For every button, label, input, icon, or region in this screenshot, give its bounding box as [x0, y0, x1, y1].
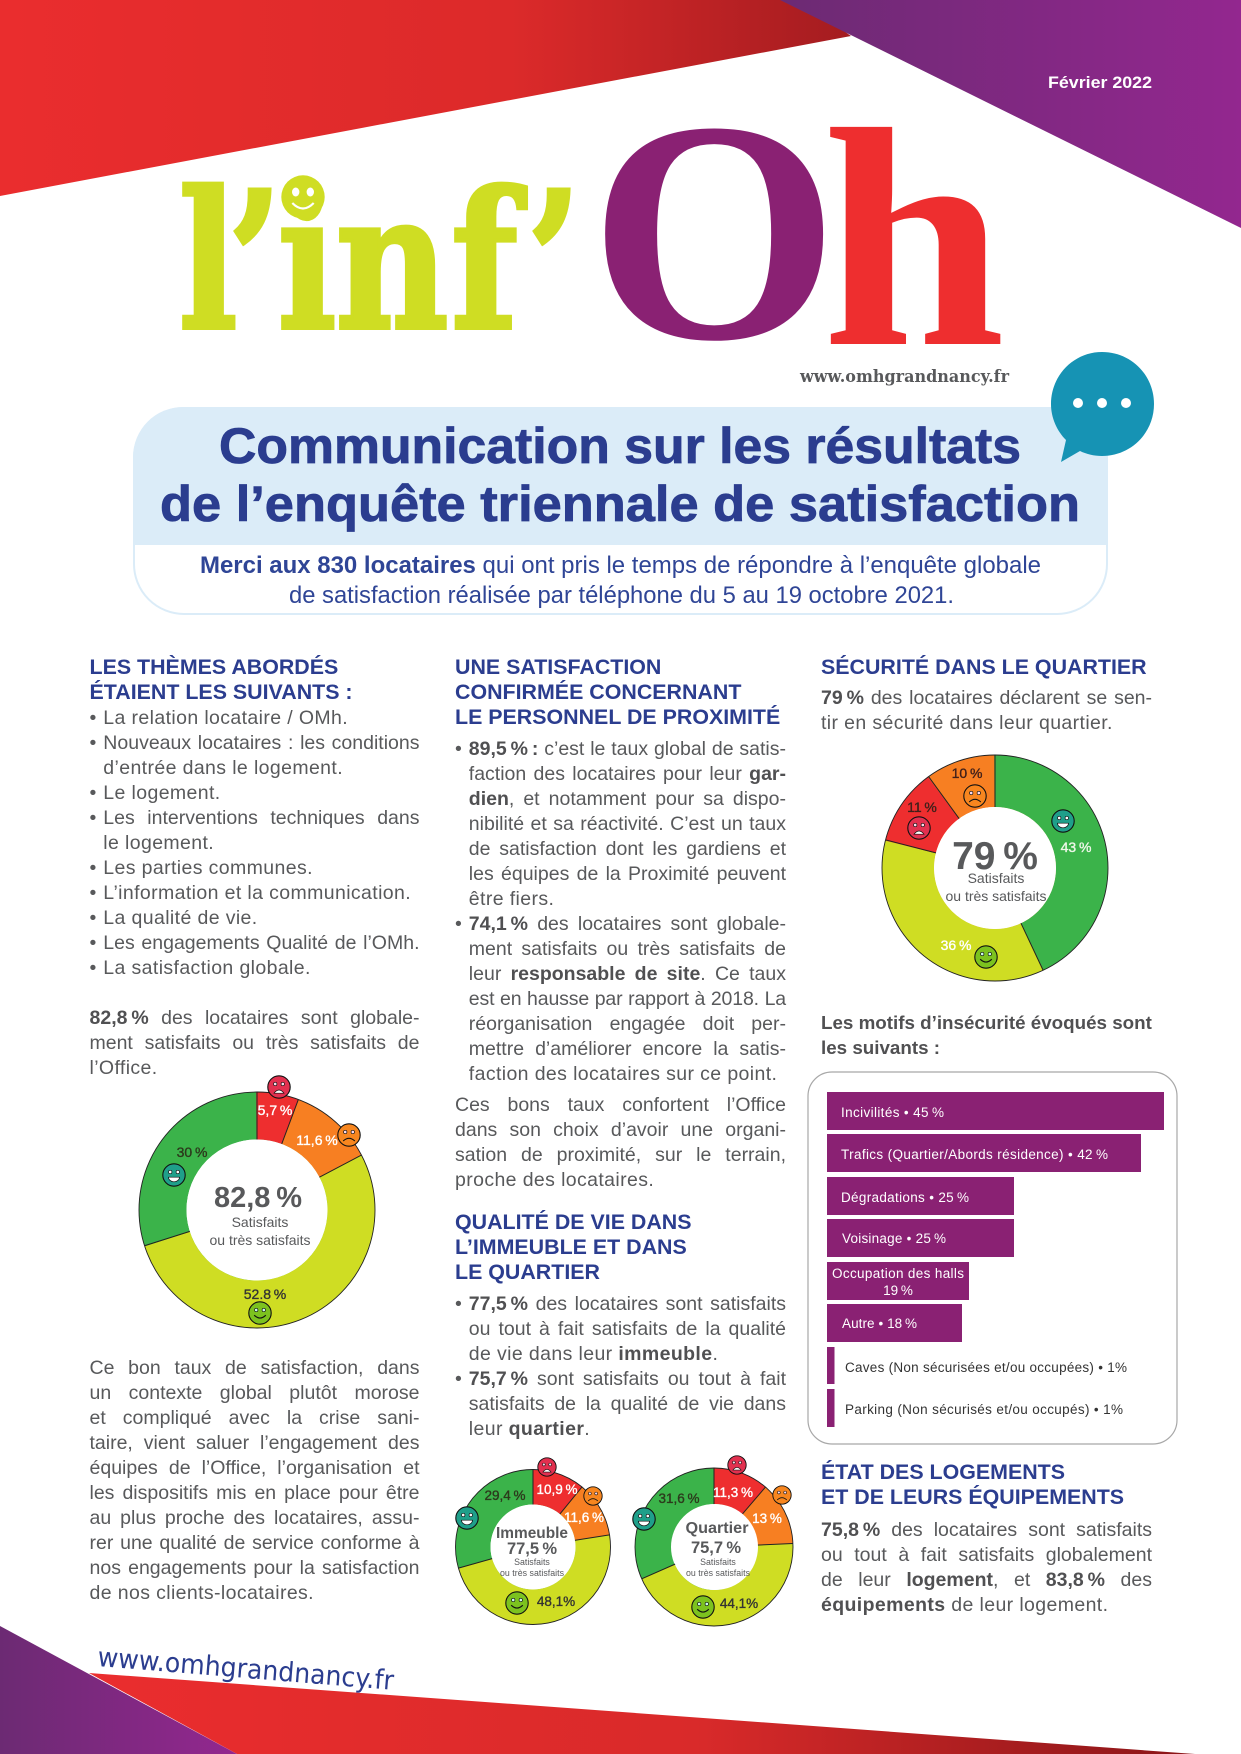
- text block: proximity staff results: 74,1 % des locataires sont globale-: [469, 913, 786, 935]
- centre label: 79 %: [952, 835, 1038, 878]
- text block: housing: [821, 1519, 1152, 1616]
- smiley icons: [633, 1456, 791, 1618]
- bottom red banner: [89, 1673, 1195, 1754]
- heading: themes: LES THÈMES ABORDÉS: [90, 654, 338, 678]
- text block: themes list: [90, 706, 420, 978]
- centre label: Satisfaits: [514, 1557, 550, 1567]
- bar: Dégradations: [827, 1177, 1014, 1215]
- value labels: [177, 1102, 338, 1302]
- text block: themes list: Les engagements Qualité de l’OMh.: [103, 932, 420, 954]
- bar: Voisinage: [827, 1219, 1014, 1257]
- text block: proximity staff results: •: [455, 913, 462, 935]
- heading: proximity staff: UNE SATISFACTION: [455, 654, 661, 678]
- value labels: [659, 1485, 782, 1611]
- text block: themes list: •: [90, 906, 97, 928]
- text block: themes list: •: [90, 732, 96, 754]
- centre label: Satisfaits: [700, 1557, 736, 1567]
- heading: housing condition: [821, 1460, 1124, 1509]
- text block: proximity staff results: les équipes de la Proximité peuvent: [469, 863, 786, 885]
- centre label: 82,8 %: [214, 1182, 302, 1214]
- logo: l'inf': l’inf’: [179, 150, 581, 373]
- icon: smiley dot on the i: [281, 175, 325, 219]
- value labels: 29,4 %: [485, 1488, 525, 1503]
- text block: overall satisfaction: ment satisfaits ou très satisfaits de: [90, 1032, 420, 1054]
- title line 1: Communication sur les résultats: [219, 418, 1021, 474]
- logo: h: h: [822, 65, 1005, 412]
- text block: organisation: [455, 1094, 786, 1191]
- text block: proximity staff results: réorganisation engagée doit per-: [469, 1013, 786, 1035]
- value labels: 30 %: [177, 1144, 207, 1160]
- text block: themes list: Nouveaux locataires : les conditions: [103, 732, 420, 754]
- value labels: 10 %: [952, 765, 982, 781]
- bar: Trafics: [827, 1134, 1141, 1172]
- value labels: 36 %: [941, 937, 971, 953]
- text block: themes list: Les interventions techniques dans: [103, 806, 420, 828]
- value labels: 11 %: [907, 799, 937, 815]
- value labels: 11,3 %: [713, 1485, 753, 1500]
- ring segments: [139, 1092, 375, 1328]
- centre label: ou très satisfaits: [946, 888, 1046, 904]
- value labels: 52.8 %: [244, 1286, 286, 1302]
- text block: themes list: •: [90, 782, 97, 804]
- text block: themes list: •: [90, 882, 97, 904]
- chart frame: [808, 1072, 1177, 1444]
- text block: themes list: •: [90, 956, 97, 978]
- text block: comment on satisfaction: [90, 1357, 420, 1604]
- text block: themes list: •: [90, 856, 97, 878]
- centre label: [686, 1520, 751, 1578]
- text block: housing: équipements de leur logement.: [821, 1594, 1108, 1616]
- text block: themes list: L’information et la communication.: [103, 882, 411, 904]
- heading: neighbourhood safety: SÉCURITÉ DANS LE QUARTIER: [821, 654, 1147, 678]
- logo: O: O: [590, 56, 839, 406]
- text block: quality of life results: ou tout à fait satisfaits de la qualité: [469, 1318, 786, 1340]
- text block: themes list: La qualité de vie.: [103, 906, 258, 928]
- heading: quality of life: LE QUARTIER: [455, 1260, 600, 1284]
- smiley icons: [456, 1458, 602, 1614]
- centre label: Satisfaits: [232, 1214, 288, 1230]
- date: Février 2022: [1048, 74, 1152, 92]
- text block: themes list: •: [90, 806, 96, 828]
- panel title background: [133, 407, 1107, 545]
- value labels: 5,7 %: [258, 1102, 292, 1118]
- text block: proximity staff results: faction des locataires pour leur gar-: [469, 763, 786, 785]
- text block: safety: [821, 686, 1152, 734]
- text block: organisation: dans son choix d’avoir une organi-: [455, 1119, 786, 1141]
- text block: proximity staff results: être fiers.: [469, 888, 554, 910]
- title line 2: de l’enquête triennale de satisfaction: [160, 476, 1080, 532]
- value labels: 13 %: [752, 1511, 782, 1526]
- text block: themes list: •: [90, 932, 96, 954]
- thanks line 2: de satisfaction réalisée par téléphone du 5 au 19 octobre 2021.: [289, 582, 954, 609]
- text block: comment on satisfaction: les dispositifs mis en place pour être: [90, 1482, 420, 1504]
- bar: Autre: [827, 1304, 962, 1342]
- bar: Occupation des halls: Occupation des halls: [832, 1266, 964, 1281]
- text block: proximity staff results: 89,5 % : c’est le taux global de satis-: [469, 738, 786, 760]
- text block: comment on satisfaction: rer une qualité de service conforme à: [90, 1532, 420, 1554]
- donut chart: global satisfaction: [139, 1076, 375, 1328]
- centre label: ou très satisfaits: [500, 1568, 565, 1578]
- text block: safety: 79 % des locataires déclarent se sen-: [821, 686, 1152, 708]
- text block: comment on satisfaction: Ce bon taux de satisfaction, dans: [90, 1357, 420, 1379]
- heading: reasons for insecurity: les suivants :: [821, 1037, 940, 1058]
- ring segments: [456, 1470, 610, 1624]
- text block: organisation: proche des locataires.: [455, 1169, 654, 1191]
- bar: Occupation des halls: [827, 1262, 969, 1300]
- text block: proximity staff results: dien, et notamment pour sa dispo-: [469, 788, 786, 810]
- logo: [179, 56, 1005, 412]
- text block: overall satisfaction: l’Office.: [90, 1056, 158, 1078]
- text block: quality of life results: 75,7 % sont satisfaits ou tout à fait: [469, 1368, 786, 1390]
- text block: quality of life results: •: [455, 1293, 462, 1315]
- text block: organisation: sation de proximité, sur le terrain,: [455, 1144, 786, 1166]
- centre label: Immeuble: [496, 1525, 568, 1542]
- bar: Autre: Autre • 18 %: [842, 1316, 917, 1331]
- icon: speech bubble: [1051, 352, 1154, 462]
- smiley icons: [908, 785, 1074, 968]
- text block: organisation: Ces bons taux confortent l’Office: [455, 1094, 786, 1116]
- text block: comment on satisfaction: un contexte global plutôt morose: [90, 1382, 420, 1404]
- value labels: 44,1%: [720, 1596, 758, 1611]
- text block: proximity staff results: faction des locataires sur ce point.: [469, 1063, 777, 1085]
- heading: themes: ÉTAIENT LES SUIVANTS :: [90, 680, 353, 704]
- value labels: 11,6 %: [564, 1510, 604, 1525]
- heading: quality of life: [455, 1210, 692, 1284]
- heading: housing condition: ÉTAT DES LOGEMENTS: [821, 1460, 1065, 1484]
- text block: themes list: La relation locataire / OMh.: [103, 706, 348, 728]
- text block: proximity staff results: [455, 738, 786, 1085]
- ring segments: [635, 1468, 793, 1626]
- bar: Caves: [827, 1347, 1127, 1384]
- bar chart: reasons for insecurity: [808, 1072, 1177, 1444]
- value labels: 48,1%: [537, 1594, 575, 1609]
- value labels: [485, 1482, 604, 1609]
- bar: Dégradations: Dégradations • 25 %: [841, 1190, 969, 1205]
- text block: proximity staff results: mettre d’améliorer encore la satis-: [469, 1038, 786, 1060]
- heading: reasons for insecurity: [821, 1012, 1152, 1058]
- bar: Occupation des halls: 19 %: [883, 1283, 913, 1298]
- text block: comment on satisfaction: taire, vient saluer l’engagement des: [90, 1432, 420, 1454]
- top red banner: [0, 0, 851, 196]
- text block: housing: de leur logement, et 83,8 % des: [821, 1569, 1152, 1591]
- heading: quality of life: L’IMMEUBLE ET DANS: [455, 1234, 687, 1258]
- smiley icons: [163, 1076, 360, 1324]
- text block: comment on satisfaction: et compliqué avec la crise sani-: [90, 1407, 420, 1429]
- text block: comment on satisfaction: équipes de l’Office, l’organisation et: [90, 1457, 420, 1479]
- donut chart: quartier: [633, 1456, 793, 1626]
- bar: Voisinage: Voisinage • 25 %: [842, 1231, 946, 1246]
- text block: proximity staff results: nibilité et sa réactivité. C’est un taux: [469, 813, 786, 835]
- text block: themes list: Le logement.: [103, 782, 221, 804]
- text block: housing: ou tout à fait satisfaits globalement: [821, 1544, 1152, 1566]
- centre label: Satisfaits: [968, 870, 1024, 886]
- text block: proximity staff results: •: [455, 738, 462, 760]
- donut chart: immeuble: [456, 1458, 610, 1624]
- text block: quality of life results: de vie dans leur immeuble.: [469, 1343, 718, 1365]
- text block: themes list: Les parties communes.: [103, 856, 313, 878]
- centre label: 77,5 %: [507, 1540, 557, 1558]
- text block: comment on satisfaction: au plus proche des locataires, assu-: [90, 1507, 420, 1529]
- text block: quality of life results: leur quartier.: [469, 1418, 590, 1440]
- text block: proximity staff results: est en hausse par rapport à 2018. La: [469, 988, 786, 1010]
- bar: Incivilités: [827, 1092, 1164, 1130]
- text block: safety: tir en sécurité dans leur quartier.: [821, 712, 1113, 734]
- panel: title box: [133, 407, 1107, 614]
- ring segments: [882, 755, 1108, 981]
- text block: quality of life results: satisfaits de la qualité de vie dans: [469, 1393, 786, 1415]
- centre label: ou très satisfaits: [686, 1568, 751, 1578]
- bar: Parking: [827, 1389, 1123, 1427]
- bottom purple triangle: [0, 1626, 237, 1754]
- footer website: www.omhgrandnancy.fr: [96, 1642, 396, 1697]
- text block: quality of life results: [455, 1293, 786, 1440]
- text block: comment on satisfaction: de nos clients-locataires.: [90, 1582, 314, 1604]
- donut chart: neighbourhood safety: [882, 755, 1108, 981]
- centre label: [210, 1182, 310, 1248]
- text block: themes list: •: [90, 706, 97, 728]
- value labels: 11,6 %: [296, 1132, 338, 1148]
- top purple banner: [780, 0, 1241, 228]
- centre label: [946, 835, 1046, 904]
- heading: proximity staff: [455, 654, 780, 728]
- text block: proximity staff results: de satisfaction dont les gardiens et: [469, 838, 786, 860]
- text block: overall satisfaction: [90, 1006, 420, 1078]
- text block: themes list: d’entrée dans le logement.: [103, 756, 343, 778]
- text block: themes list: le logement.: [103, 832, 214, 854]
- value labels: 31,6 %: [659, 1491, 699, 1506]
- text block: themes list: La satisfaction globale.: [103, 956, 311, 978]
- text block: proximity staff results: leur responsable de site. Ce taux: [469, 963, 786, 985]
- heading: proximity staff: LE PERSONNEL DE PROXIMITÉ: [455, 704, 780, 728]
- thanks line 1: Merci aux 830 locataires qui ont pris le temps de répondre à l’enquête globale: [200, 552, 1041, 579]
- panel outline: [134, 408, 1107, 614]
- value labels: 43 %: [1061, 839, 1091, 855]
- text block: quality of life results: •: [455, 1368, 462, 1390]
- website under logo: www.omhgrandnancy.fr: [799, 367, 1010, 387]
- bar: Incivilités: Incivilités • 45 %: [841, 1105, 944, 1120]
- heading: quality of life: QUALITÉ DE VIE DANS: [455, 1210, 692, 1234]
- heading: reasons for insecurity: Les motifs d’insécurité évoqués sont: [821, 1012, 1152, 1033]
- value labels: 10,9 %: [537, 1482, 577, 1497]
- heading: proximity staff: CONFIRMÉE CONCERNANT: [455, 680, 741, 704]
- value labels: [907, 765, 1091, 953]
- centre label: 75,7 %: [691, 1539, 741, 1557]
- bar: Trafics: Trafics (Quartier/Abords résidence) • 42 %: [841, 1147, 1108, 1162]
- text block: quality of life results: 77,5 % des locataires sont satisfaits: [469, 1293, 786, 1315]
- text block: housing: 75,8 % des locataires sont satisfaits: [821, 1519, 1152, 1541]
- heading: themes: [90, 654, 353, 704]
- bar: Parking: Parking (Non sécurisés et/ou occupés) • 1%: [845, 1402, 1123, 1417]
- text block: proximity staff results: ment satisfaits ou très satisfaits de: [469, 938, 786, 960]
- centre label: ou très satisfaits: [210, 1232, 310, 1248]
- centre label: [496, 1525, 568, 1578]
- centre label: Quartier: [686, 1520, 748, 1537]
- text block: overall satisfaction: 82,8 % des locataires sont globale-: [90, 1006, 420, 1028]
- bar: Caves: Caves (Non sécurisées et/ou occupées) • 1%: [845, 1360, 1127, 1375]
- heading: housing condition: ET DE LEURS ÉQUIPEMENTS: [821, 1485, 1124, 1509]
- text block: comment on satisfaction: nos engagements pour la satisfaction: [90, 1557, 420, 1579]
